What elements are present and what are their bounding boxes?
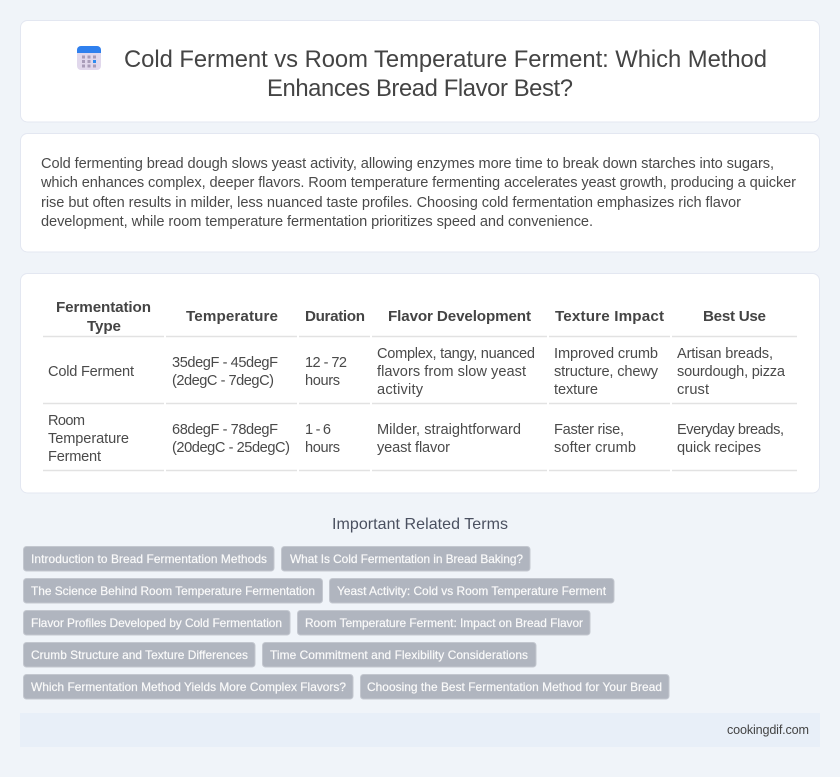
table row: cold ferment: Improved crumb [554, 346, 658, 362]
footer: cookingdif.com [727, 723, 809, 737]
table row: cold ferment: sourdough, pizza [677, 364, 786, 380]
footer [20, 713, 820, 747]
table header row: Duration [305, 308, 365, 325]
heading: important related terms: Important Related Terms [332, 516, 508, 533]
table row: cold ferment: structure, chewy [554, 364, 659, 380]
panel: related term tags: Which Fermentation Method Yields More Complex Flavors? [31, 680, 346, 694]
panel: related term tags: Choosing the Best Fermentation Method for Your Bread [367, 680, 662, 694]
table header row: Fermentation [56, 299, 151, 316]
panel: related term tags [24, 546, 669, 699]
table row: cold ferment: 12 - 72 [305, 355, 347, 371]
table row: room temperature ferment: hours [305, 440, 340, 456]
text block: introduction paragraph: Cold fermenting bread dough slows yeast activity, allowing enzymes more time to break down starches into sugars, [41, 156, 774, 172]
table row: room temperature ferment: Everyday breads, [677, 422, 784, 438]
text block: introduction paragraph: which enhances complex, deeper flavors. Room temperature fermenting accelerates yeast growth, producing a quicker [40, 175, 796, 191]
icon: calendar [77, 46, 101, 70]
text block: introduction paragraph [40, 156, 796, 230]
table row: room temperature ferment: Temperature [48, 431, 129, 447]
table header row: Flavor Development [388, 308, 531, 325]
table row: room temperature ferment: yeast flavor [377, 440, 450, 456]
table header row: Temperature [186, 308, 278, 325]
panel: related term tags: Flavor Profiles Developed by Cold Fermentation [31, 616, 282, 630]
table row: cold ferment: crust [677, 382, 709, 398]
table row: cold ferment: Artisan breads, [677, 346, 773, 362]
text block: introduction paragraph: development, while room temperature fermentation prioritizes speed and convenience. [41, 214, 593, 230]
table row: room temperature ferment: Room [48, 413, 85, 429]
text block: introduction paragraph: rise but often results in milder, less nuanced taste profiles. Choosing cold fermentation emphasizes rich flavor [41, 195, 741, 211]
table header row: Best Use [703, 308, 766, 325]
table row: cold ferment: Complex, tangy, nuanced [377, 346, 535, 362]
table row: room temperature ferment: 1 - 6 [305, 422, 331, 438]
panel: related term tags: What Is Cold Fermentation in Bread Baking? [290, 552, 523, 566]
table row: room temperature ferment: (20degC - 25degC) [172, 440, 290, 456]
table header row [56, 299, 766, 335]
title [124, 46, 767, 102]
table row: room temperature ferment: Faster rise, [554, 422, 624, 438]
table row: cold ferment: (2degC - 7degC) [172, 373, 274, 389]
table row: room temperature ferment [48, 413, 784, 465]
title: Cold Ferment vs Room Temperature Ferment: Which Method [124, 46, 767, 73]
panel: introduction [20, 134, 820, 252]
table header row: Texture Impact [555, 308, 664, 325]
table row: room temperature ferment: Ferment [48, 449, 101, 465]
table row: cold ferment: texture [554, 382, 598, 398]
table row: cold ferment [48, 346, 786, 398]
table row: cold ferment: Cold Ferment [48, 364, 134, 380]
table row: room temperature ferment: Milder, straightforward [377, 422, 521, 438]
table row: cold ferment: activity [377, 382, 424, 398]
title: Enhances Bread Flavor Best? [267, 75, 573, 102]
table header row: Type [87, 318, 121, 335]
panel: related term tags: Introduction to Bread Fermentation Methods [31, 552, 267, 566]
panel: related term tags: Crumb Structure and Texture Differences [31, 648, 248, 662]
panel: title header [20, 20, 820, 122]
table row: room temperature ferment: quick recipes [677, 440, 761, 456]
table row: cold ferment: flavors from slow yeast [377, 364, 526, 380]
panel: related term tags: Room Temperature Ferment: Impact on Bread Flavor [305, 616, 583, 630]
panel: related term tags: Yeast Activity: Cold vs Room Temperature Ferment [337, 584, 607, 598]
panel: related term tags: The Science Behind Room Temperature Fermentation [31, 584, 315, 598]
table row: cold ferment: 35degF - 45degF [172, 355, 278, 371]
panel: related term tags: Time Commitment and Flexibility Considerations [270, 648, 528, 662]
table row: room temperature ferment: 68degF - 78degF [172, 422, 278, 438]
table row: room temperature ferment: softer crumb [554, 440, 636, 456]
panel: comparison table [20, 274, 820, 493]
table row: cold ferment: hours [305, 373, 340, 389]
